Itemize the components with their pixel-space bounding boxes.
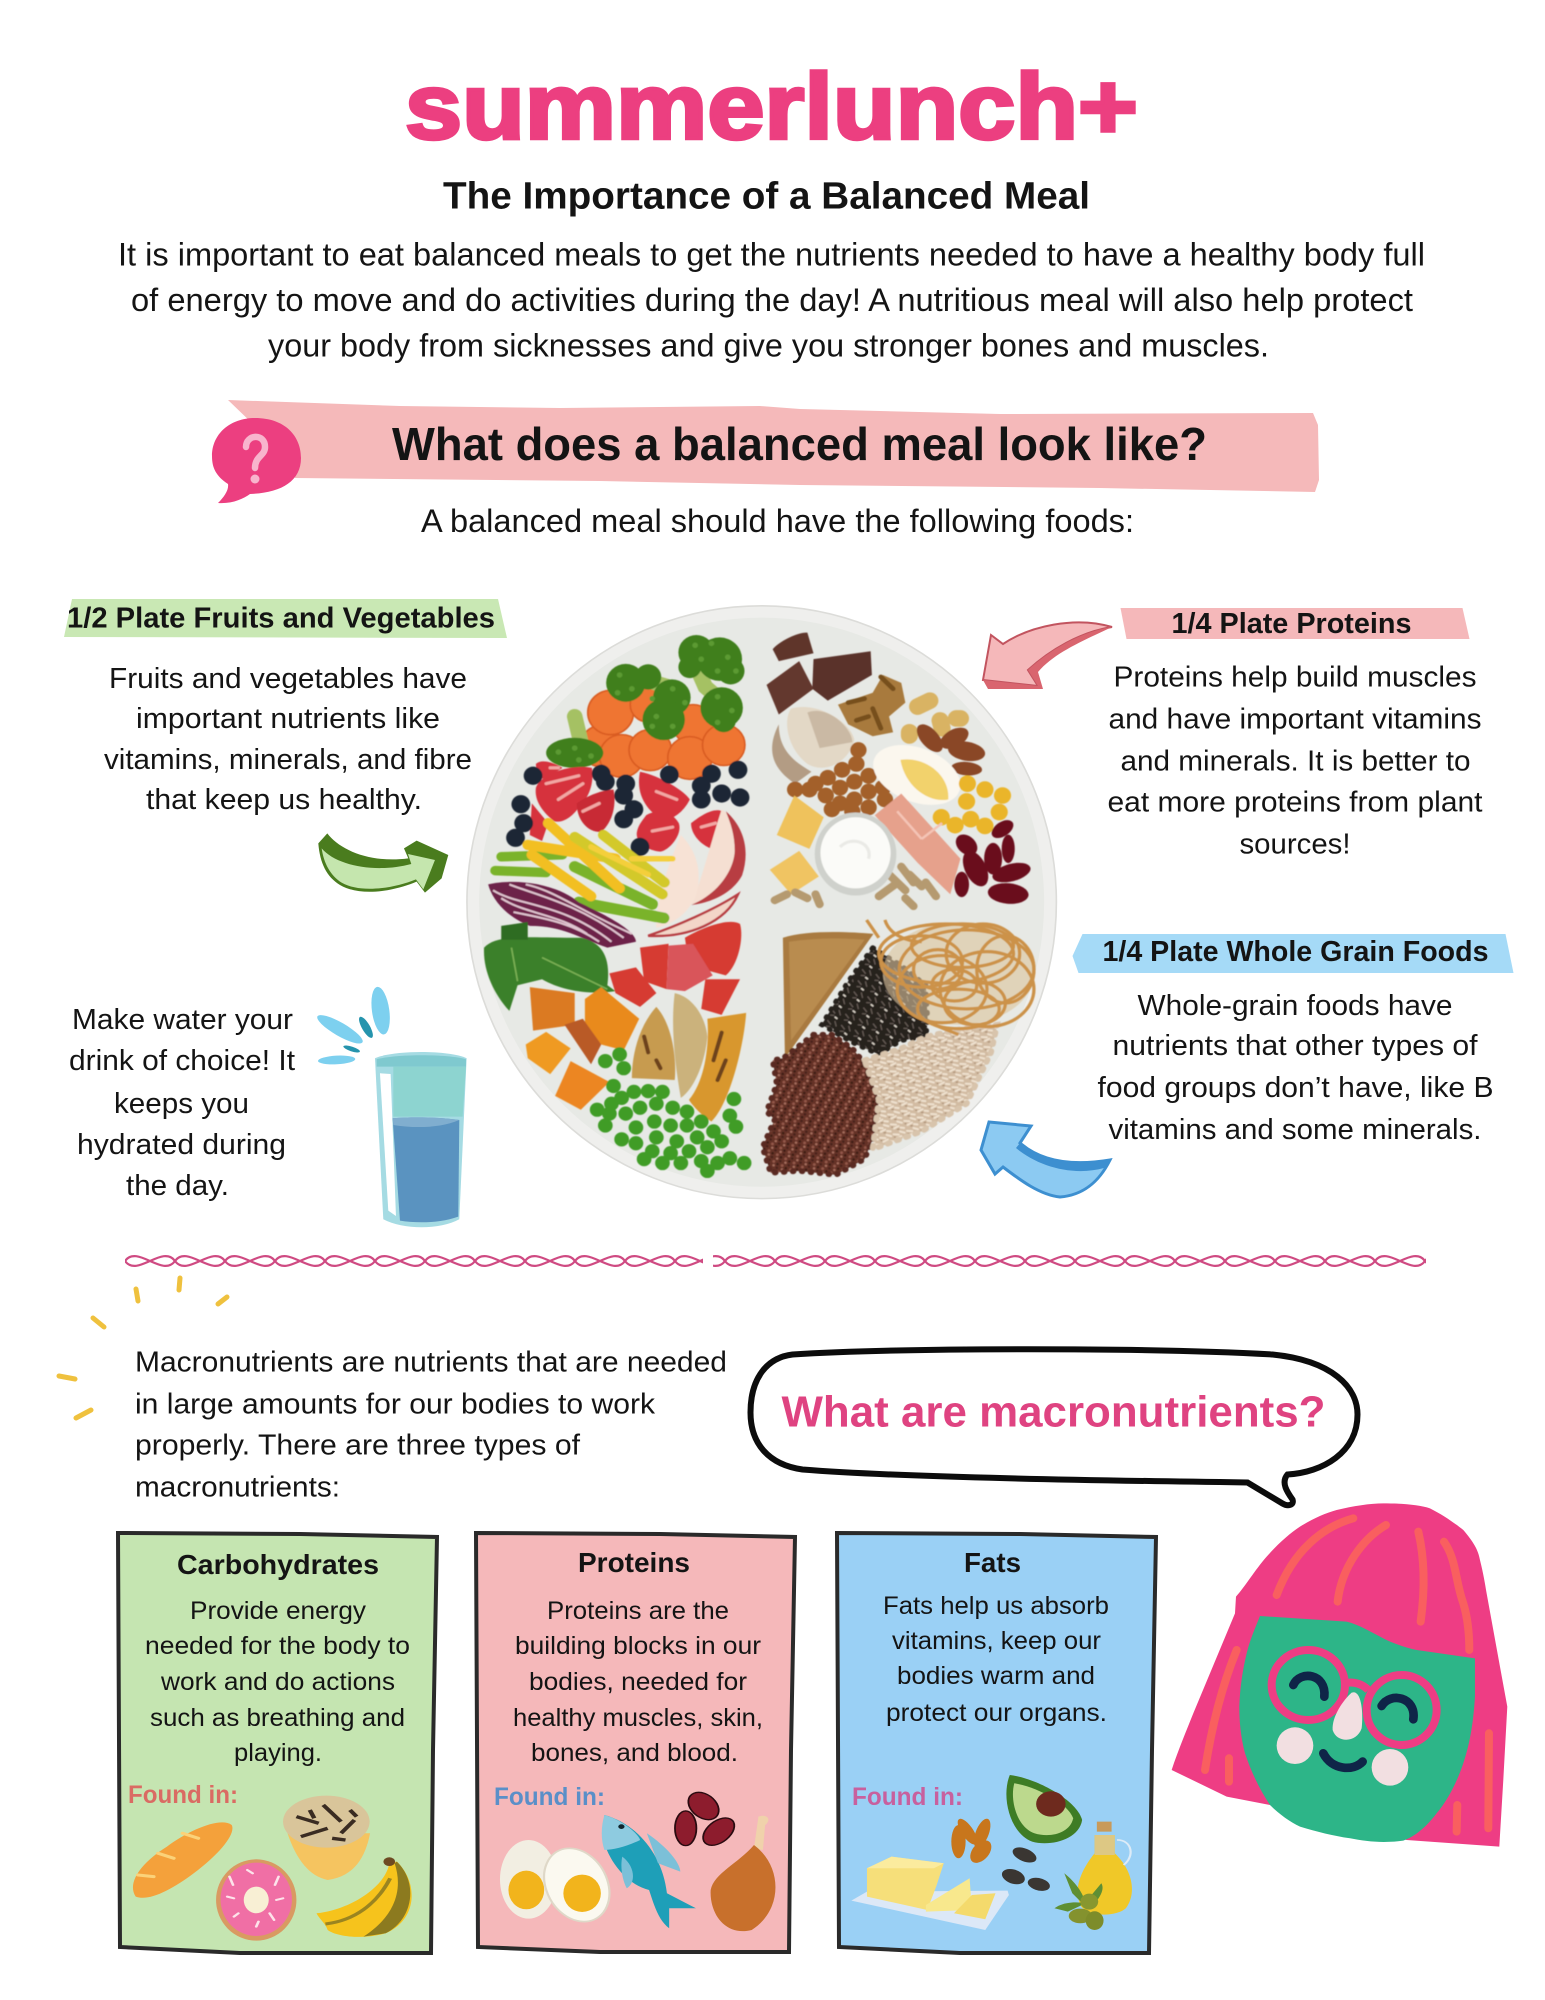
text: fruits and vegetables: Fruits and vegetables have [109,663,467,695]
text: water: drink of choice! It [69,1045,295,1077]
carbohydrates description: needed for the body to [145,1632,410,1660]
text: fruits and vegetables [104,663,472,816]
card: carbohydrates: Found in: [128,1781,238,1809]
text: macronutrients description: Macronutrients are nutrients that are needed [135,1346,727,1378]
text: fruits and vegetables: important nutrients like [136,703,440,735]
icon: sunburst dashes [59,1278,227,1418]
whole grains [762,920,1034,1175]
carbohydrate food icons [133,1796,412,1941]
text: proteins: Proteins help build muscles [1114,662,1476,694]
text: water: Make water your [72,1004,293,1036]
card: fats: Found in: [852,1783,963,1811]
label: fruits and vegetables: 1/2 Plate Fruits and Vegetables [67,602,495,634]
title: summerlunch+ [405,54,1138,158]
icon: question speech bubble [212,418,301,503]
text: whole grains: food groups don’t have, like B [1098,1072,1494,1104]
carbohydrates description: Provide energy [190,1597,367,1625]
text: whole grains [1098,990,1494,1146]
card: carbohydrates [118,1533,437,1953]
text: macronutrients description: macronutrients: [135,1472,340,1504]
text: fruits and vegetables: that keep us healthy. [146,784,422,816]
card: proteins: Found in: [494,1783,605,1811]
intro paragraph [118,236,1425,364]
fats description: vitamins, keep our [892,1627,1101,1655]
banner: what does a balanced meal look like [228,400,1319,492]
carbohydrates description: work and do actions [160,1668,395,1696]
protein food icons [500,1788,775,1931]
fats description: protect our organs. [886,1699,1107,1727]
text: water: the day. [126,1170,229,1202]
label: proteins [1120,608,1470,640]
vegetables and fruits [484,635,746,1171]
text: water [69,1004,295,1202]
plate of food [467,606,1056,1199]
carbohydrates description: playing. [234,1739,322,1767]
character: girl with pink hair and glasses [1172,1503,1507,1847]
speech bubble: what are macronutrients [750,1349,1358,1505]
intro paragraph: your body from sicknesses and give you stronger bones and muscles. [268,328,1269,364]
carbohydrates description: such as breathing and [150,1704,405,1732]
speech bubble: what are macronutrients: What are macronutrients? [782,1388,1326,1436]
card: proteins [476,1533,795,1952]
proteins [767,633,1033,906]
arrow: blue [981,1122,1110,1197]
fats description [883,1592,1109,1727]
text: proteins: and have important vitamins [1108,704,1482,736]
proteins description [513,1597,763,1767]
label: whole grains: 1/4 Plate Whole Grain Foods [1102,936,1488,968]
proteins description: bodies, needed for [529,1668,747,1696]
intro paragraph: of energy to move and do activities during the day! A nutritious meal will also help protect [131,282,1413,318]
text: fruits and vegetables: vitamins, minerals, and fibre [104,744,472,776]
card: fats [837,1533,1156,1953]
text: whole grains: Whole-grain foods have [1138,990,1452,1022]
text: water: hydrated during [77,1129,286,1161]
intro paragraph: It is important to eat balanced meals to get the nutrients needed to have a healthy body full [118,236,1425,272]
card: fats: Fats [964,1547,1021,1578]
text: water: keeps you [114,1088,249,1120]
text: whole grains: nutrients that other types of [1112,1030,1478,1062]
card: proteins: Proteins [578,1547,690,1578]
text: proteins: sources! [1240,828,1350,860]
text: proteins [1108,662,1482,860]
fats description: bodies warm and [897,1662,1095,1690]
text: macronutrients description: properly. There are three types of [135,1430,581,1462]
card: carbohydrates: Carbohydrates [177,1549,379,1580]
text: whole grains: vitamins and some minerals. [1108,1114,1482,1146]
text: following foods: A balanced meal should have the following foods: [421,503,1134,539]
arrow: green [318,833,448,893]
text: macronutrients description [135,1346,727,1504]
text: proteins: eat more proteins from plant [1108,786,1482,818]
subtitle: The Importance of a Balanced Meal [443,176,1090,218]
proteins description: bones, and blood. [531,1739,738,1767]
text: proteins: and minerals. It is better to [1120,746,1470,778]
fat food icons [851,1775,1132,1930]
proteins description: building blocks in our [515,1632,761,1660]
proteins description: healthy muscles, skin, [513,1704,763,1732]
fats description: Fats help us absorb [883,1592,1109,1620]
arrow: pink [983,622,1112,689]
text: macronutrients description: in large amounts for our bodies to work [135,1388,656,1420]
carbohydrates description [145,1597,410,1767]
banner: what does a balanced meal look like: What does a balanced meal look like? [392,418,1207,470]
icon: glass of water [314,986,467,1227]
proteins description: Proteins are the [547,1597,729,1625]
label: proteins: 1/4 Plate Proteins [1172,608,1412,640]
